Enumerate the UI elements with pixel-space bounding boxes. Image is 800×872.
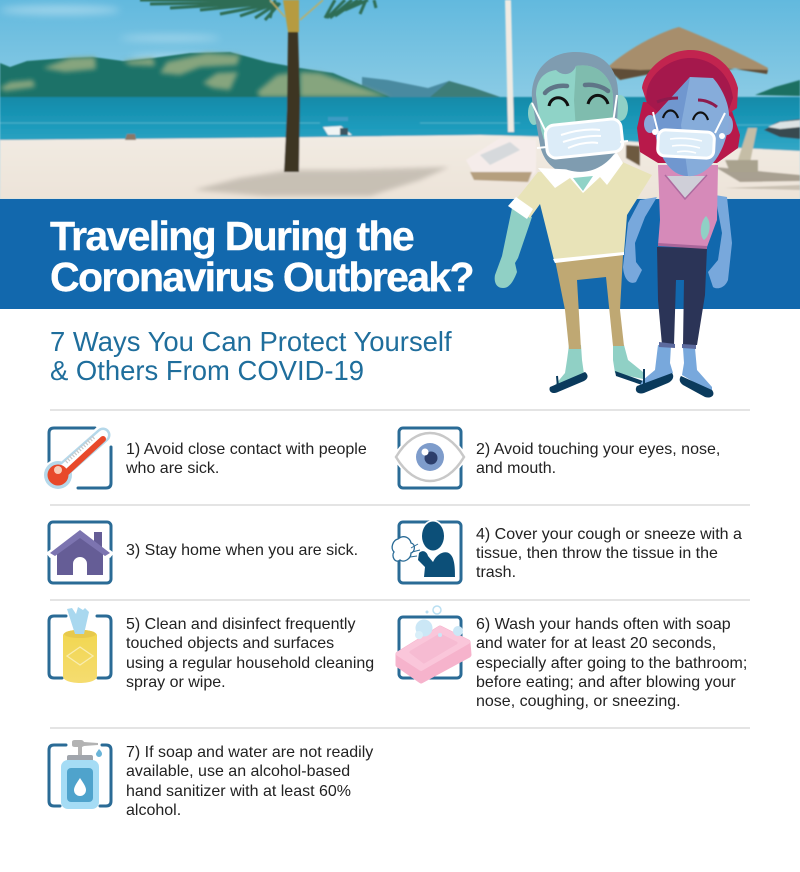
woman's flip-flops <box>636 369 713 398</box>
man <box>495 52 652 393</box>
text: tip 7: hand sanitizer with at least 60% <box>126 783 351 800</box>
icon: house <box>46 522 114 583</box>
icon: soap bar <box>398 606 469 681</box>
icon: disinfectant wipes <box>49 607 111 683</box>
text: tip 5: using a regular household cleaning <box>126 655 374 672</box>
text: tip 6: and water for at least 20 seconds, <box>476 635 716 652</box>
text: tip 5: spray or wipe. <box>126 674 226 691</box>
icon: sanitizer bottle <box>49 740 111 809</box>
text: tip 2: 2) Avoid touching your eyes, nose, <box>476 441 720 458</box>
text: tip 5: touched objects and surfaces <box>126 635 334 652</box>
text: tip 1: who are sick. <box>125 460 219 477</box>
title: Traveling During the <box>50 213 414 259</box>
text: tip 6: especially after going to the bathroom; <box>476 655 747 672</box>
title banner <box>0 199 800 309</box>
beach photo <box>0 0 800 199</box>
title: Coronavirus Outbreak? <box>50 254 473 300</box>
hair <box>637 102 740 163</box>
text: tip 4: tissue, then throw the tissue in the <box>476 545 718 562</box>
woman <box>623 50 740 398</box>
subtitle: 7 Ways You Can Protect Yourself <box>50 326 452 357</box>
text: tip 3: 3) Stay home when you are sick. <box>126 542 358 559</box>
text: tip 6: before eating; and after blowing your <box>476 674 736 691</box>
text: tip 6: 6) Wash your hands often with soap <box>476 616 731 633</box>
text: tip 6: nose, coughing, or sneezing. <box>476 693 681 710</box>
illustration: couple wearing masks <box>495 50 740 398</box>
icon: person coughing <box>392 520 461 583</box>
text: tip 1: 1) Avoid close contact with people <box>126 441 367 458</box>
icon: eye <box>396 428 464 488</box>
text: tip 7: alcohol. <box>126 802 181 819</box>
text: tip 4: trash. <box>476 564 516 581</box>
text: tip 2: and mouth. <box>476 460 556 477</box>
text: tip 4: 4) Cover your cough or sneeze with a <box>476 526 742 543</box>
subtitle: & Others From COVID-19 <box>50 355 364 386</box>
text: tip 7: 7) If soap and water are not readily <box>126 744 373 761</box>
text: tip 5: 5) Clean and disinfect frequently <box>126 616 355 633</box>
text: tip 7: available, use an alcohol-based <box>126 763 350 780</box>
icon: thermometer <box>42 428 111 491</box>
man's flip-flops <box>549 371 643 393</box>
